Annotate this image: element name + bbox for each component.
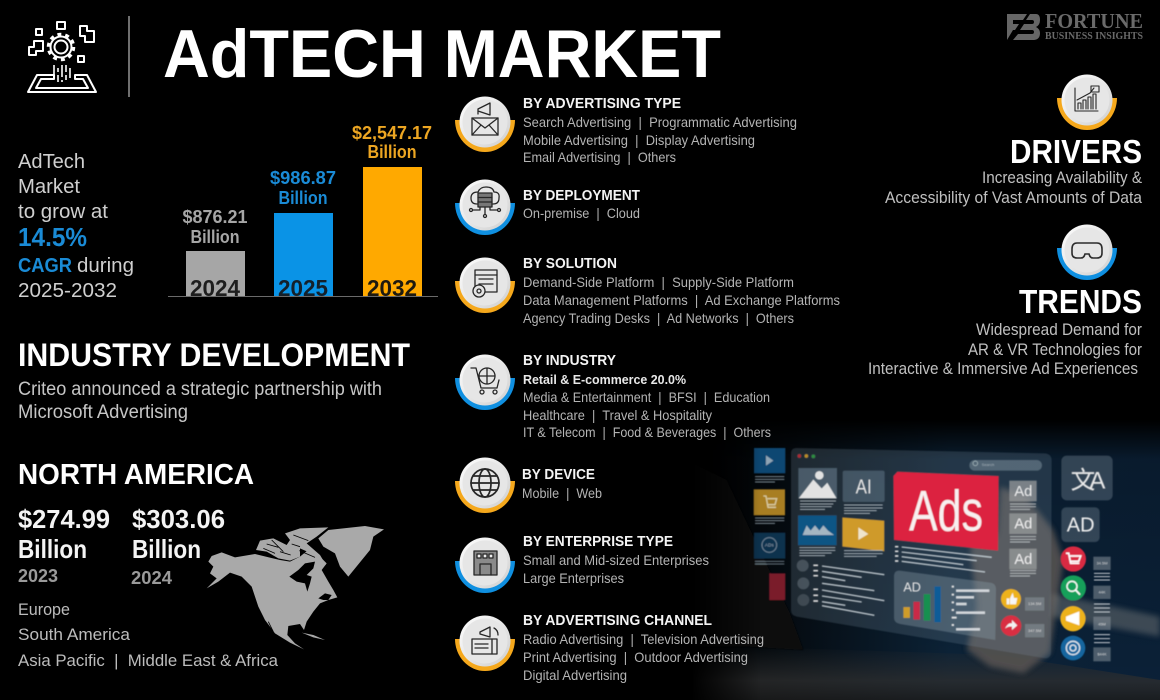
industry development <box>18 337 410 423</box>
AD chart card <box>894 571 996 640</box>
photo: hand touching holographic ads screen: 347.5M <box>1028 628 1041 633</box>
photo: hand touching holographic ads screen: AD <box>903 580 921 594</box>
trends: TRENDS <box>1019 283 1142 320</box>
drivers: Accessibility of Vast Amounts of Data <box>885 189 1143 207</box>
AI card <box>843 471 885 502</box>
photo: hand touching holographic ads screen <box>690 420 1160 700</box>
segment: by advertising type <box>455 96 797 165</box>
segment: by advertising channel: Radio Advertising | Television Advertising <box>523 631 764 647</box>
photo: hand touching holographic ads screen: 134.5M <box>1028 601 1041 606</box>
left text rows <box>813 565 818 601</box>
segment: by industry: IT & Telecom | Food & Beverages | Others <box>523 424 771 440</box>
bar 2032: Billion <box>368 142 416 162</box>
title icon: gear and data grid <box>28 22 96 92</box>
map: North America <box>207 526 384 649</box>
small Ad cards <box>1009 481 1037 501</box>
north america region: $274.99 <box>18 504 110 534</box>
segment: by solution: BY SOLUTION <box>523 256 617 272</box>
title: AdTECH MARKET <box>163 16 721 92</box>
segment: by advertising channel: Digital Advertising <box>523 667 627 683</box>
trends: Widespread Demand for <box>976 321 1142 339</box>
yellow video card <box>842 517 884 551</box>
badge: dashboard with gear <box>455 258 515 313</box>
bar 2032: 2032 <box>367 275 417 301</box>
blue card <box>798 515 837 545</box>
text rows under Ads <box>895 547 898 561</box>
segment: by deployment <box>455 180 640 235</box>
segment: by industry: Healthcare | Travel & Hospitality <box>523 407 712 423</box>
segment: by enterprise type: Small and Mid-sized Enterprises <box>523 552 709 568</box>
badge: cloud server <box>455 180 515 235</box>
north america region: 2023 <box>18 566 58 586</box>
segment: by enterprise type: Large Enterprises <box>523 570 624 586</box>
segment: by solution <box>455 256 840 326</box>
badge: radio and megaphone <box>455 616 515 671</box>
photo: hand touching holographic ads screen: A <box>1089 468 1105 495</box>
trends: Interactive & Immersive Ad Experiences <box>868 360 1138 378</box>
badge: office building <box>455 538 515 593</box>
laptop wedge <box>693 463 803 650</box>
image card <box>798 468 837 499</box>
bar 2024: $876.21 <box>182 207 248 227</box>
translate card <box>1061 456 1113 500</box>
main translucent panel <box>791 448 1052 658</box>
right buttons <box>1061 546 1086 572</box>
bar 2024 <box>182 207 248 301</box>
segment: by advertising channel: Print Advertising | Outdoor Advertising <box>523 649 748 665</box>
photo: hand touching holographic ads screen: Ad <box>1014 552 1032 568</box>
photo: hand touching holographic ads screen: AI <box>856 476 872 498</box>
segment: by enterprise type: BY ENTERPRISE TYPE <box>523 534 673 550</box>
drivers: DRIVERS <box>1010 133 1142 170</box>
segment: by solution: Demand-Side Platform | Supply-Side Platform <box>523 274 794 290</box>
CAGR statement: 2025-2032 <box>18 280 117 302</box>
photo: hand touching holographic ads screen: 文 <box>1071 467 1095 495</box>
segment: by device: BY DEVICE <box>522 467 595 483</box>
CAGR statement: during <box>77 255 134 277</box>
bar 2024: 2024 <box>190 275 240 301</box>
logo: Fortune Business Insights <box>1007 9 1143 42</box>
segment: by solution: Agency Trading Desks | Ad Networks | Others <box>523 310 794 326</box>
badge: growth chart <box>1057 74 1117 130</box>
bar 2024: Billion <box>190 227 240 247</box>
segment: by advertising channel <box>455 613 764 683</box>
north america region: South America <box>18 625 131 644</box>
north america region <box>18 459 279 670</box>
industry development: Criteo announced a strategic partnership with <box>18 379 382 400</box>
segment: by device <box>455 458 602 513</box>
photo: hand touching holographic ads screen: 34.5M <box>1096 561 1108 566</box>
segment: by device: Mobile | Web <box>522 485 602 501</box>
title divider <box>128 16 130 97</box>
drivers: Increasing Availability & <box>982 169 1142 187</box>
photo: hand touching holographic ads screen: 45M <box>1098 621 1106 626</box>
bar 2025: Billion <box>278 188 328 208</box>
industry development: INDUSTRY DEVELOPMENT <box>18 337 410 373</box>
bar 2025 <box>270 168 336 301</box>
logo: Fortune Business Insights: FORTUNE <box>1045 9 1143 33</box>
segment: by industry: Media & Entertainment | BFSI | Education <box>523 389 770 405</box>
north america region: Asia Pacific | Middle East & Africa <box>18 651 279 670</box>
CAGR statement: 14.5% <box>18 222 87 252</box>
industry development: Microsoft Advertising <box>18 402 188 423</box>
photo: hand touching holographic ads screen: ADs <box>765 543 774 548</box>
left sidebar cards <box>754 448 785 473</box>
badge: envelope and megaphone <box>455 96 515 152</box>
photo: hand touching holographic ads screen: Search <box>982 462 994 467</box>
light streak <box>1052 593 1160 637</box>
trends: AR & VR Technologies for <box>968 341 1142 359</box>
segment: by advertising type: BY ADVERTISING TYPE <box>523 96 681 112</box>
CAGR statement: AdTech <box>18 151 85 173</box>
north america region: 2024 <box>131 568 172 588</box>
like and share buttons <box>1001 589 1021 609</box>
photo: hand touching holographic ads screen: 44K <box>1098 590 1106 595</box>
badge: shopping cart with globe <box>455 354 515 410</box>
photo: hand touching holographic ads screen: Ad <box>1014 484 1032 500</box>
photo: hand touching holographic ads screen: Ads <box>909 480 983 544</box>
segment: by advertising type: Search Advertising | Programmatic Advertising <box>523 114 797 130</box>
segment: by advertising type: Email Advertising | Others <box>523 149 676 165</box>
north america region: $303.06 <box>132 504 225 534</box>
CAGR statement <box>18 151 134 302</box>
CAGR statement: Market <box>18 176 80 198</box>
bar 2032 <box>352 123 432 301</box>
segment: by enterprise type <box>455 534 709 593</box>
segment: by deployment: BY DEPLOYMENT <box>523 188 640 204</box>
hand <box>967 487 1063 673</box>
badge: VR headset <box>1057 224 1117 280</box>
CAGR statement: CAGR <box>18 255 73 277</box>
segment: by industry: BY INDUSTRY <box>523 353 616 369</box>
CAGR statement: to grow at <box>18 201 108 223</box>
segment: by advertising channel: BY ADVERTISING CHANNEL <box>523 613 712 629</box>
badge: globe <box>455 458 515 513</box>
photo: hand touching holographic ads screen: $44K <box>1097 652 1107 657</box>
bar chart: market size <box>168 123 438 301</box>
segment: by industry <box>455 353 771 440</box>
north america region: Billion <box>18 534 87 564</box>
trends <box>868 224 1142 378</box>
logo: Fortune Business Insights: BUSINESS INSIGHTS <box>1045 31 1143 42</box>
north america region: NORTH AMERICA <box>18 459 254 491</box>
segment: by advertising type: Mobile Advertising | Display Advertising <box>523 132 755 148</box>
drivers <box>885 74 1143 207</box>
north america region: Europe <box>18 600 70 619</box>
north america region: Billion <box>132 534 201 564</box>
photo: hand touching holographic ads screen: AD <box>1067 515 1095 537</box>
AD card <box>1061 507 1100 542</box>
red Ads card <box>893 472 999 551</box>
bar 2032: $2,547.17 <box>352 123 432 143</box>
segment: by industry: Retail & E-commerce 20.0% <box>523 372 686 387</box>
bar 2025: 2025 <box>278 275 328 301</box>
segment: by deployment: On-premise | Cloud <box>523 205 640 221</box>
bar 2025: $986.87 <box>270 168 336 188</box>
segment: by solution: Data Management Platforms | Ad Exchange Platforms <box>523 292 840 308</box>
photo: hand touching holographic ads screen: Ad <box>1014 517 1032 533</box>
